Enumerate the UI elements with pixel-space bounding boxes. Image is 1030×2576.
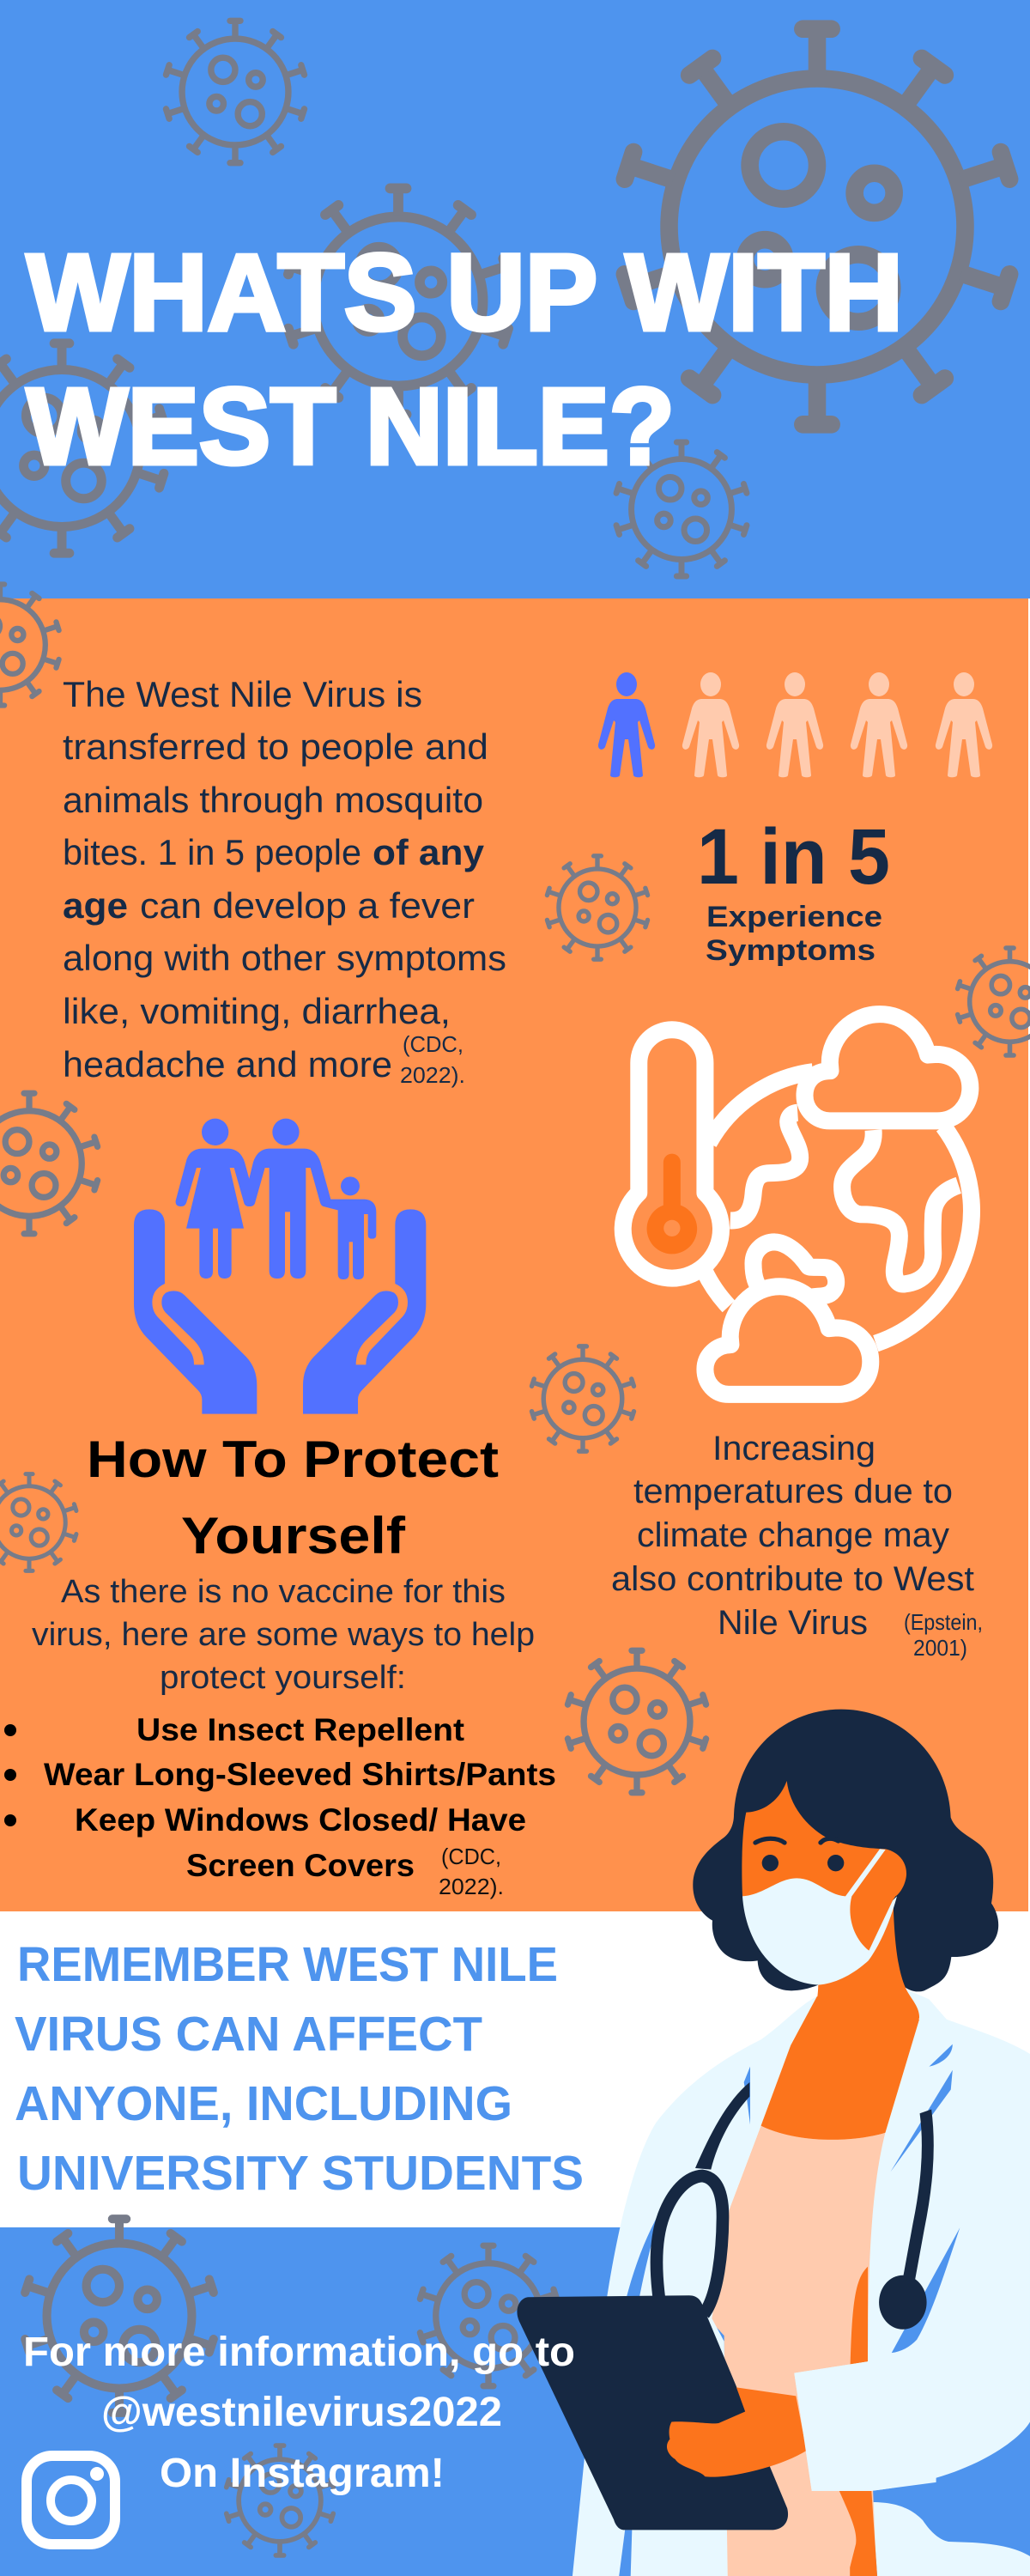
head: hair, face and mask bbox=[693, 1710, 998, 2072]
statistic: 1 in 5 bbox=[697, 813, 890, 967]
text block: introduction: The West Nile Virus is bbox=[63, 674, 422, 714]
icon: row of five people bbox=[598, 672, 992, 777]
list: protection measures: 2022). bbox=[439, 1874, 504, 1899]
icon: virus right of list bbox=[567, 1650, 706, 1793]
icon: virus footer left bbox=[25, 2219, 214, 2413]
callout: remember: REMEMBER WEST NILE bbox=[17, 1937, 558, 1992]
icon: virus footer bottom bbox=[227, 2445, 333, 2555]
text block: climate change: also contribute to West bbox=[611, 1560, 974, 1598]
text block: climate change bbox=[611, 1430, 983, 1661]
icon: virus below globe bbox=[532, 1346, 633, 1451]
icon: virus right edge bbox=[958, 948, 1030, 1055]
text block: introduction: headache and more bbox=[63, 1044, 392, 1084]
text block: introduction: animals through mosquito bbox=[63, 780, 483, 820]
text block: no vaccine: As there is no vaccine for this bbox=[61, 1574, 506, 1610]
text block: introduction: age bbox=[63, 885, 128, 926]
icon: large virus top right bbox=[625, 29, 1009, 424]
text block: introduction: along with other symptoms bbox=[63, 938, 506, 978]
list: protection measures: Keep Windows Closed/ Have bbox=[75, 1802, 526, 1838]
list: protection measures: Wear Long-Sleeved Shirts/Pants bbox=[44, 1757, 556, 1792]
title: WEST NILE? bbox=[27, 366, 675, 487]
icon: virus footer centre bbox=[420, 2245, 557, 2386]
callout: remember: VIRUS CAN AFFECT bbox=[15, 2007, 482, 2062]
text block: climate change: temperatures due to bbox=[633, 1473, 953, 1510]
text block: introduction: bites. 1 in 5 people bbox=[63, 832, 361, 872]
text block: climate change: (Epstein, bbox=[904, 1609, 983, 1635]
text block: more information: @westnilevirus2022 bbox=[101, 2390, 502, 2435]
text block: climate change: climate change may bbox=[637, 1516, 949, 1554]
heading: how to protect yourself bbox=[87, 1431, 499, 1564]
text block: introduction: like, vomiting, diarrhea, bbox=[63, 991, 451, 1031]
icon: virus left of heading bbox=[0, 1474, 76, 1571]
text block: introduction: (CDC, bbox=[403, 1031, 464, 1057]
list: protection measures: Screen Covers bbox=[186, 1848, 415, 1883]
icon: hands holding family bbox=[134, 1119, 426, 1414]
callout: remember: UNIVERSITY STUDENTS bbox=[17, 2146, 584, 2201]
text block: introduction bbox=[63, 674, 506, 1088]
clipboard, hand and sleeve bbox=[517, 2295, 936, 2530]
icon: virus left of family bbox=[0, 1093, 98, 1234]
text block: more information: For more information, go to bbox=[23, 2330, 575, 2375]
text block: introduction: of any bbox=[373, 832, 485, 872]
statistic: 1 in 5: Experience bbox=[706, 901, 882, 933]
stethoscope left tube bbox=[627, 2067, 750, 2314]
icon: virus at band edge bbox=[0, 584, 59, 706]
text block: introduction: transferred to people and bbox=[63, 726, 488, 767]
panel: orange main background bbox=[0, 598, 1028, 1911]
heading: how to protect yourself: Yourself bbox=[181, 1507, 406, 1564]
callout: remember: ANYONE, INCLUDING bbox=[15, 2076, 512, 2131]
text block: no vaccine: virus, here are some ways to help bbox=[32, 1617, 535, 1653]
text block: climate change: Nile Virus bbox=[718, 1604, 868, 1642]
statistic: 1 in 5: Symptoms bbox=[706, 934, 876, 967]
list: protection measures: (CDC, bbox=[441, 1844, 501, 1869]
icon: virus near 1 in 5 bbox=[547, 856, 648, 959]
text block: introduction: can develop a fever bbox=[140, 885, 475, 926]
list: protection measures bbox=[4, 1712, 556, 1899]
icon: virus behind title bbox=[288, 188, 508, 415]
text block: more information: On Instagram! bbox=[160, 2451, 445, 2496]
list: protection measures: Use Insect Repellent bbox=[136, 1712, 464, 1747]
icon: instagram logo bbox=[27, 2456, 115, 2544]
panel: blue footer background bbox=[0, 2227, 1030, 2576]
text block: introduction: 2022). bbox=[400, 1062, 465, 1088]
title: WHATS UP WITH bbox=[27, 232, 903, 353]
illustration: doctor wearing mask bbox=[517, 1710, 1030, 2576]
panel: blue header background bbox=[0, 0, 1030, 598]
icon: globe with thermometer and clouds bbox=[623, 1014, 972, 1394]
icon: virus top left bbox=[166, 21, 305, 163]
text block: more information bbox=[23, 2330, 575, 2496]
text block: no vaccine bbox=[32, 1574, 535, 1696]
panel: white callout background bbox=[0, 1911, 1030, 2227]
icon: virus left behind title bbox=[0, 343, 164, 553]
heading: how to protect yourself: How To Protect bbox=[87, 1431, 499, 1488]
callout: remember bbox=[15, 1937, 584, 2201]
text block: climate change: Increasing bbox=[712, 1430, 876, 1467]
text block: climate change: 2001) bbox=[913, 1635, 967, 1661]
text block: no vaccine: protect yourself: bbox=[160, 1660, 406, 1696]
statistic: 1 in 5: 1 in 5 bbox=[697, 813, 890, 901]
title bbox=[27, 232, 903, 487]
icon: virus below title bbox=[616, 442, 747, 576]
